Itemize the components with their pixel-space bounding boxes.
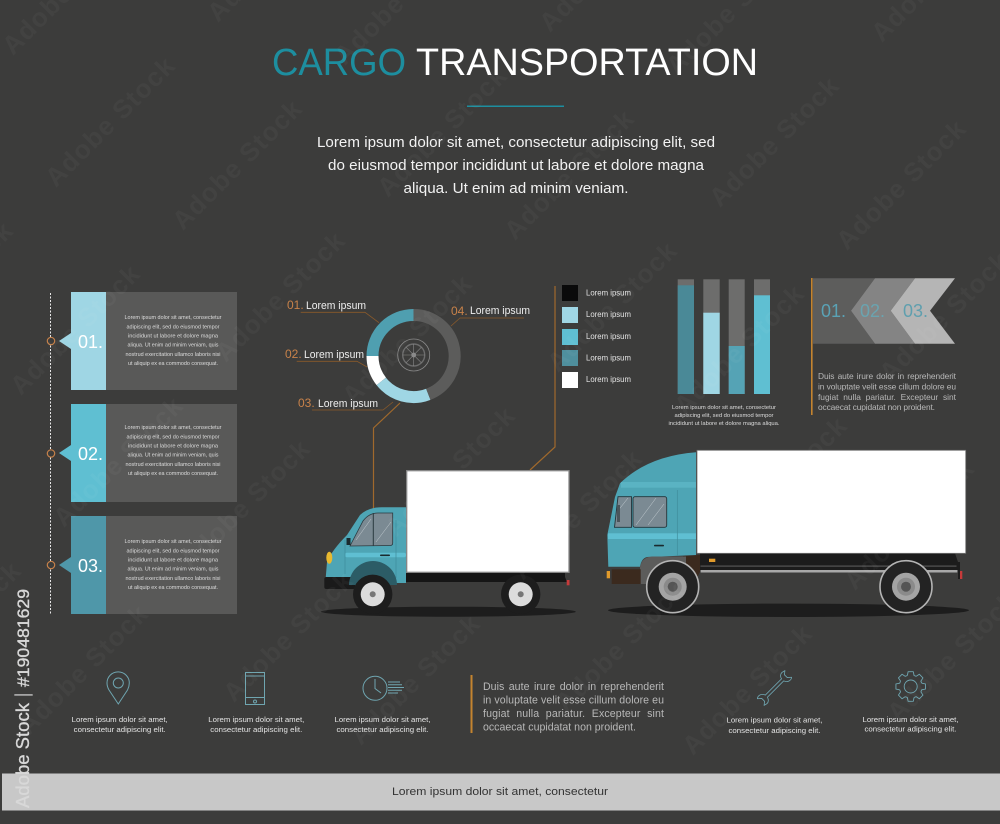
bar chart caption: incididunt ut labore et dolore magna aliqua.	[668, 421, 780, 427]
stock watermark pattern: Adobe Stock	[217, 566, 359, 707]
legend: Lorem ipsum	[586, 375, 631, 384]
stock id label	[12, 589, 33, 808]
legend	[562, 285, 631, 388]
chevron paragraph: in voluptate velit esse cillum dolore eu	[818, 382, 956, 392]
small truck	[321, 471, 576, 617]
feature: repair: consectetur adipiscing elit.	[728, 726, 820, 735]
central paragraph: occaecat cupidatat non proident.	[483, 722, 636, 734]
stock watermark pattern: Adobe Stock	[344, 609, 486, 750]
panel: step 01: 01.	[78, 332, 103, 352]
panel: step 02: incididunt ut labore et dolore magna	[128, 444, 219, 450]
icon: phone	[246, 672, 264, 704]
panel: step 02: 02.	[78, 444, 103, 464]
feature: repair: Lorem ipsum dolor sit amet,	[726, 716, 822, 724]
stock watermark pattern: Adobe Stock	[4, 259, 146, 400]
feature: fast delivery	[334, 676, 430, 734]
legend: Lorem ipsum	[586, 288, 631, 298]
stock watermark pattern: Adobe Stock	[166, 94, 308, 235]
panel: step 03: incididunt ut labore et dolore magna	[128, 558, 219, 564]
stock watermark pattern: Adobe Stock	[549, 576, 691, 717]
front wheel	[353, 575, 392, 614]
title: TRANSPORTATION	[416, 42, 758, 84]
feature: settings: consectetur adipiscing elit.	[864, 724, 956, 734]
panel: step 03: aliqua. Ut enim ad minim veniam, quis	[128, 566, 219, 572]
stock watermark pattern: Adobe Stock	[541, 236, 683, 377]
icon: wrench	[757, 670, 792, 706]
donut labels: 03.	[298, 396, 315, 410]
feature: settings: Lorem ipsum dolor sit amet,	[862, 715, 958, 724]
chevron paragraph: Duis aute irure dolor in reprehenderit	[818, 371, 957, 381]
stock id label: #190481629	[15, 589, 33, 687]
stock watermark pattern: Adobe Stock	[711, 411, 853, 552]
stock watermark pattern: Adobe Stock	[703, 71, 845, 212]
stock watermark pattern: Adobe Stock	[336, 269, 478, 410]
feature: location: consectetur adipiscing elit.	[74, 725, 166, 734]
icon: map pin	[107, 672, 129, 704]
stock watermark pattern: Adobe Stock	[830, 114, 972, 255]
stock watermark pattern: Adobe Stock	[47, 391, 189, 532]
panel: step 03	[47, 516, 237, 614]
truck box	[407, 471, 569, 572]
feature: repair	[726, 670, 822, 735]
intro text: do eiusmod tempor incididunt ut labore et dolore magna	[328, 157, 705, 174]
chevron steps: 02.	[860, 301, 885, 321]
bar chart caption: Lorem ipsum dolor sit amet, consectetur	[672, 405, 776, 411]
feature: mobile: Lorem ipsum dolor sit amet,	[208, 715, 304, 724]
chevron paragraph: occaecat cupidatat non proident.	[818, 402, 935, 412]
stock watermark pattern: Adobe Stock	[676, 619, 818, 760]
rear wheel	[880, 561, 932, 613]
connector lines to trucks	[374, 286, 555, 510]
chevron steps: 01.	[821, 301, 846, 321]
feature: fast delivery: Lorem ipsum dolor sit amet,	[334, 715, 430, 724]
stock watermark pattern: Adobe Stock	[12, 599, 154, 740]
intro text	[317, 134, 715, 197]
stock watermark pattern: Adobe Stock	[506, 444, 648, 585]
feature: fast delivery: consectetur adipiscing elit.	[336, 725, 428, 734]
donut labels: 02.	[285, 347, 302, 361]
donut labels: Lorem ipsum	[318, 398, 378, 410]
chevron paragraph: fugiat nulla pariatur. Excepteur sint	[818, 392, 957, 402]
donut labels: Lorem ipsum	[306, 300, 366, 312]
central paragraph: fugiat nulla pariatur. Excepteur sint	[483, 708, 664, 720]
chevron steps	[811, 278, 955, 415]
donut labels	[285, 298, 530, 410]
donut labels: 04.	[451, 304, 468, 318]
panel: step 03: 03.	[78, 556, 103, 576]
stock watermark pattern: Adobe Stock	[838, 454, 980, 595]
stock id label: Adobe Stock	[12, 702, 33, 808]
panel: step 02: nostrud exercitation ullamco laboris nisi	[126, 462, 220, 468]
central paragraph: in voluptate velit esse cillum dolore eu	[483, 694, 664, 706]
intro text: aliqua. Ut enim ad minim veniam.	[404, 180, 628, 197]
legend: Lorem ipsum	[586, 310, 631, 319]
panel: step 01: adipiscing elit, sed do eiusmod tempor	[126, 324, 220, 330]
title: CARGO	[272, 42, 406, 84]
icon: gear	[896, 672, 925, 701]
feature: location: Lorem ipsum dolor sit amet,	[72, 715, 168, 724]
donut labels: 01.	[287, 298, 304, 312]
panel: step 02: ut aliquip ex ea commodo consequat.	[128, 471, 218, 477]
chevron steps: 03.	[903, 301, 928, 321]
bar chart caption: adipiscing elit, sed do eiusmod tempor	[674, 413, 774, 419]
panel: step 01: aliqua. Ut enim ad minim veniam, quis	[128, 342, 219, 348]
panel: step 02	[47, 404, 237, 502]
footer band: Lorem ipsum dolor sit amet, consectetur	[392, 786, 608, 798]
legend: Lorem ipsum	[586, 332, 631, 341]
panel: step 01: incididunt ut labore et dolore magna	[128, 334, 219, 340]
panel: step 02: Lorem ipsum dolor sit amet, consectetur	[124, 425, 222, 431]
panel: step 01: Lorem ipsum dolor sit amet, consectetur	[124, 315, 222, 321]
feature: settings	[862, 672, 958, 734]
icon: clock with speed lines	[363, 676, 404, 700]
panel: step 03: Lorem ipsum dolor sit amet, consectetur	[124, 539, 222, 545]
stock watermark pattern: Adobe Stock	[498, 104, 640, 245]
feature: mobile: consectetur adipiscing elit.	[210, 725, 302, 734]
rear wheel	[501, 575, 540, 614]
large truck	[607, 450, 969, 617]
central paragraph: Duis aute irure dolor in reprehenderit	[483, 681, 664, 693]
intro text: Lorem ipsum dolor sit amet, consectetur adipiscing elit, sed	[317, 134, 715, 151]
panel: step 03: ut aliquip ex ea commodo consequat.	[128, 585, 218, 591]
timeline panels	[47, 292, 237, 615]
panel: step 02: aliqua. Ut enim ad minim veniam, quis	[128, 452, 219, 458]
stock watermark pattern: Adobe Stock	[668, 279, 810, 420]
feature: mobile	[208, 672, 304, 734]
stock watermark pattern: Adobe Stock	[174, 434, 316, 575]
donut chart	[372, 315, 455, 397]
truck box	[697, 450, 966, 553]
donut labels: Lorem ipsum	[470, 305, 530, 317]
feature: location	[72, 672, 168, 734]
chevron paragraph	[818, 371, 957, 412]
panel: step 01: nostrud exercitation ullamco laboris nisi	[126, 352, 220, 358]
panel: step 02: adipiscing elit, sed do eiusmod tempor	[126, 434, 220, 440]
legend: Lorem ipsum	[586, 354, 631, 362]
front wheel	[647, 561, 699, 613]
bar chart caption	[668, 405, 780, 427]
icon: tyre	[398, 339, 430, 371]
footer band	[2, 774, 1000, 810]
stock watermark pattern: Adobe Stock	[39, 51, 181, 192]
bar chart	[678, 279, 770, 394]
panel: step 01: ut aliquip ex ea commodo consequat.	[128, 361, 218, 367]
stock watermark pattern: Adobe Stock	[379, 401, 521, 542]
panel: step 03: nostrud exercitation ullamco laboris nisi	[126, 576, 220, 582]
stock watermark pattern: Adobe Stock	[209, 226, 351, 367]
panel: step 03: adipiscing elit, sed do eiusmod tempor	[126, 548, 220, 554]
central paragraph	[470, 675, 664, 734]
panel: step 01	[47, 292, 237, 390]
stock watermark pattern: Adobe Stock	[371, 61, 513, 202]
donut labels: Lorem ipsum	[304, 349, 364, 361]
